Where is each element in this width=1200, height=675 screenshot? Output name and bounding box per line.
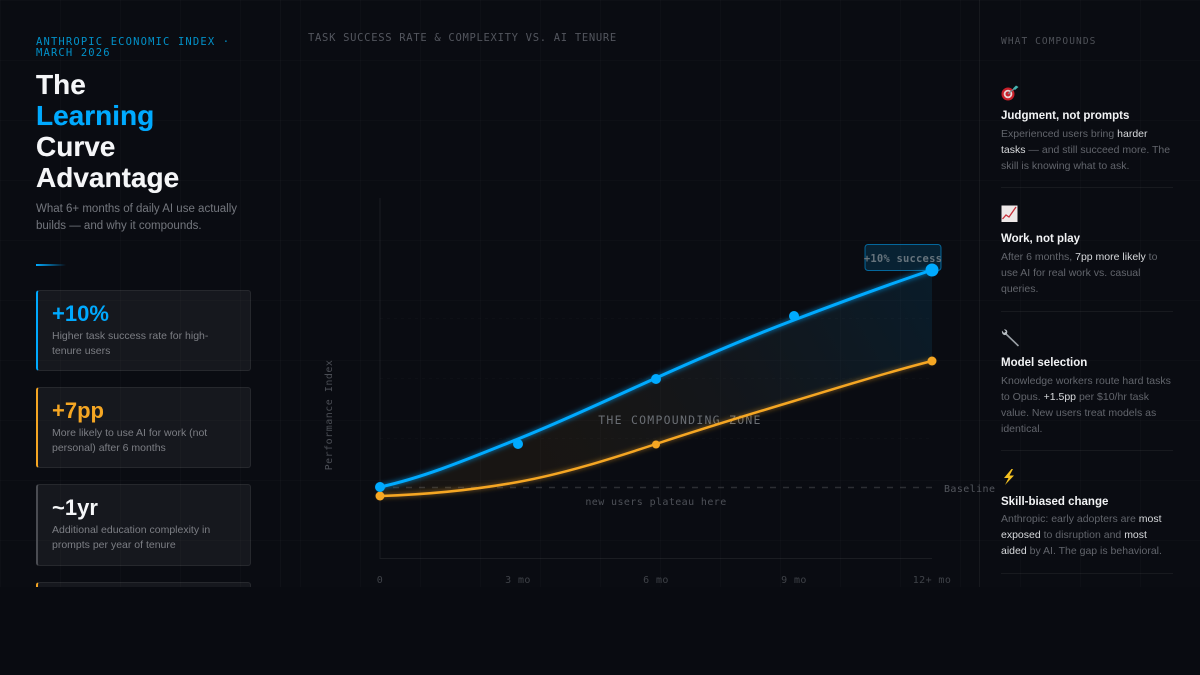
item: judgment: Experienced users bring harder tasks — and still succeed more. The skill is knowing what to ask. [1001, 128, 1170, 172]
zone label: THE COMPOUNDING ZONE [598, 413, 762, 427]
panel: left summary [36, 36, 251, 587]
baseline: new users plateau here [585, 497, 727, 508]
panel: what compounds [1001, 36, 1173, 574]
x axis labels: 12+ mo [913, 575, 951, 586]
stat card: ~1yr: Additional education complexity in prompts per year of tenure [52, 524, 210, 551]
orange line: new users [380, 361, 932, 496]
icon: wrench [1002, 329, 1019, 346]
stat card: +7pp [36, 387, 251, 468]
y axis label: Performance Index [324, 360, 335, 470]
line chart [324, 198, 995, 586]
item: model selection: Knowledge workers route hard tasks to Opus. +1.5pp per $10/hr task value. New users treat models as identical. [1001, 374, 1171, 434]
item: work: Work, not play [1001, 232, 1080, 244]
stat card: clipped fourth card [36, 582, 251, 663]
panel: center chart background [280, 0, 980, 587]
title: The [36, 69, 86, 100]
title: Advantage [36, 162, 179, 193]
axes [380, 198, 932, 558]
item: work [1001, 206, 1157, 294]
x axis labels: 9 mo [781, 575, 807, 586]
stat card: ~1yr: ~1yr [52, 495, 98, 520]
stat card: +10%: Higher task success rate for high-tenure users [52, 330, 208, 357]
blue line: experienced users [380, 270, 932, 487]
title: Curve [36, 131, 115, 162]
stat card: +7pp: +7pp [52, 398, 104, 423]
icon: dart target [1002, 86, 1018, 100]
item: judgment: Judgment, not prompts [1001, 110, 1129, 122]
x axis labels: 6 mo [643, 575, 669, 586]
callout: +10% success: +10% success [864, 253, 942, 265]
title: Learning [36, 100, 154, 131]
eyebrow label: ANTHROPIC ECONOMIC INDEX · MARCH 2026 [36, 36, 230, 58]
icon: lightning [1004, 469, 1014, 485]
callout: +10% success [864, 244, 942, 270]
chart title: TASK SUCCESS RATE & COMPLEXITY VS. AI TENURE [308, 32, 617, 44]
item: model selection [1001, 329, 1171, 434]
accent rule [36, 264, 66, 266]
x axis labels [377, 575, 951, 586]
shaded compounding zone [380, 270, 932, 496]
item: skill-biased change: Skill-biased change [1001, 496, 1108, 508]
baseline [380, 484, 995, 508]
blue data points [375, 264, 938, 492]
item: judgment [1001, 86, 1170, 172]
stat card: ~1yr [36, 484, 251, 566]
item: model selection: Model selection [1001, 356, 1087, 368]
x axis labels: 3 mo [505, 575, 531, 586]
x axis labels: 0 [377, 575, 383, 586]
item: work: After 6 months, 7pp more likely to use AI for real work vs. casual queries. [1001, 250, 1157, 294]
title [36, 69, 179, 194]
baseline: Baseline [944, 484, 995, 495]
orange data points [376, 356, 936, 500]
stat card: +7pp: More likely to use AI for work (not personal) after 6 months [52, 427, 207, 454]
item: skill-biased change [1001, 469, 1162, 557]
item: skill-biased change: Anthropic: early adopters are most exposed to disruption and most aided by AI. The gap is behavioral. [1001, 513, 1162, 557]
icon: chart increasing [1002, 206, 1018, 222]
stat card: +10%: +10% [52, 301, 109, 326]
panel heading: WHAT COMPOUNDS [1001, 36, 1096, 47]
subtitle: What 6+ months of daily AI use actually builds — and why it compounds. [36, 203, 237, 232]
stat card: +10% [36, 290, 251, 371]
horizontal guides [380, 318, 932, 438]
